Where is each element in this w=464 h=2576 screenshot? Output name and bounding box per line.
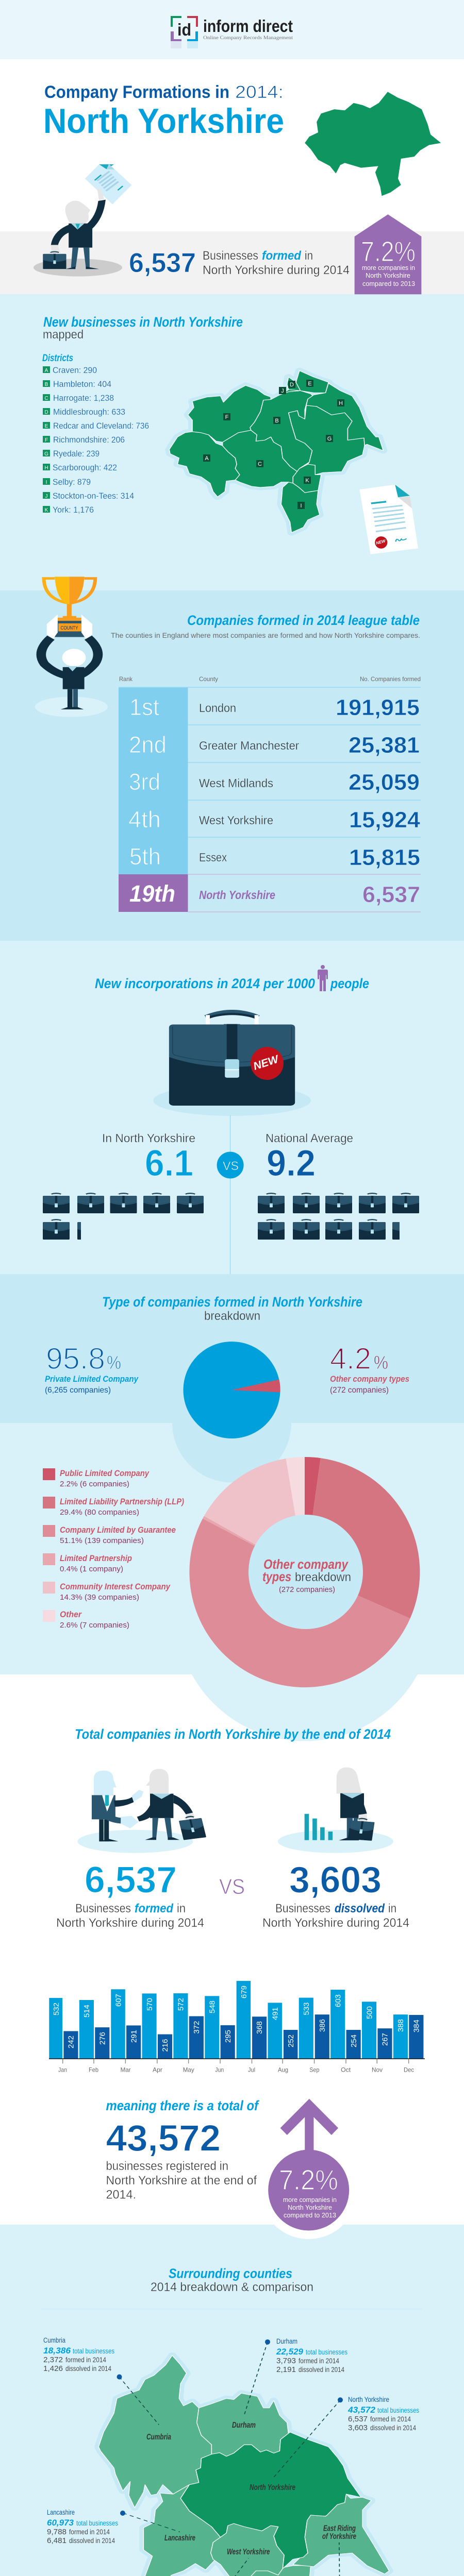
legend: districts: H — [44, 465, 48, 471]
bar chart: monthly formed and dissolved: 603 — [334, 1994, 342, 2007]
callout: Cumbria: 18,386 — [43, 2346, 71, 2355]
title — [43, 82, 284, 141]
stat: formed vs dissolved: formed — [135, 1902, 174, 1916]
table: companies formed league: 4th — [128, 806, 161, 833]
logo: inform direct: id — [177, 20, 191, 39]
legend: other company types: 2.2% (6 companies) — [60, 1480, 129, 1488]
bar chart: monthly formed and dissolved: Apr — [153, 2066, 162, 2073]
bar chart: monthly formed and dissolved: Mar — [121, 2066, 131, 2073]
bar chart: monthly formed and dissolved: 384 — [412, 2020, 421, 2032]
pictogram: 6.1 briefcases — [43, 1193, 204, 1240]
bar chart: monthly formed and dissolved: Oct — [341, 2066, 351, 2073]
icon: businessman holding document — [34, 164, 131, 277]
bar chart: monthly formed and dissolved: 267 — [380, 2033, 390, 2046]
callout: North Yorkshire: 6,537 — [348, 2415, 368, 2424]
callout: Durham: 2,191 — [276, 2365, 296, 2374]
callout: Lancashire: formed in 2014 — [69, 2528, 110, 2536]
bar chart: monthly formed and dissolved: 500 — [365, 2006, 374, 2019]
map: North Yorkshire districts: I — [300, 503, 302, 509]
donut chart: other company types breakdown — [189, 1457, 420, 1741]
callout: North Yorkshire — [347, 2396, 419, 2432]
legend: districts: Redcar and Cleveland: 736 — [53, 421, 149, 431]
donut chart: other company types breakdown: (272 companies) — [279, 1585, 335, 1594]
callout: Cumbria — [43, 2336, 114, 2373]
legend: districts: Stockton-on-Tees: 314 — [53, 491, 134, 501]
stat: formed vs dissolved: in — [177, 1902, 186, 1916]
stat: 6,537 businesses formed: formed — [262, 249, 302, 263]
table: companies formed league: Essex — [199, 851, 227, 864]
map: surrounding counties: North Yorkshire — [250, 2483, 295, 2492]
heading: new businesses mapped — [43, 314, 243, 342]
map: North Yorkshire districts: E — [308, 381, 312, 387]
legend: other company types: 29.4% (80 companies) — [60, 1508, 139, 1517]
comparison: North Yorkshire vs national average: National Average — [266, 1131, 353, 1145]
legend: other company types: 14.3% (39 companies) — [60, 1593, 139, 1602]
bar chart: monthly formed and dissolved: 216 — [161, 2039, 170, 2052]
callout: 7.2% arrow: compared to 2013 — [284, 2211, 336, 2219]
stat: 6,537 businesses formed: North Yorkshire during 2014 — [203, 263, 350, 277]
stat: formed vs dissolved: in — [388, 1902, 396, 1916]
callout: Durham: Durham — [276, 2337, 297, 2345]
heading: surrounding counties: Surrounding counties — [169, 2265, 292, 2281]
bar chart: monthly formed and dissolved: 572 — [176, 1998, 186, 2011]
heading: new incorporations per 1000 people: New incorporations in 2014 per 1000 — [95, 976, 315, 991]
legend: other company types: Public Limited Company — [60, 1468, 150, 1478]
stat: total 43,572: 43,572 — [106, 2119, 221, 2159]
table: companies formed league: North Yorkshire — [199, 888, 275, 902]
callout: Lancashire: Lancashire — [47, 2509, 75, 2516]
bar chart: monthly formed and dissolved: 570 — [145, 1998, 154, 2011]
legend: districts: Hambleton: 404 — [53, 379, 111, 389]
legend: districts: C — [44, 396, 48, 401]
map: surrounding counties — [98, 2340, 389, 2576]
map: surrounding counties: West Yorkshire — [227, 2548, 270, 2556]
bar chart: monthly formed and dissolved: 252 — [287, 2035, 295, 2047]
stat: other types 4.2%: Other company types — [330, 1374, 409, 1384]
callout: 7.2% arrow: 7.2% — [279, 2164, 338, 2196]
callout: Cumbria: 2,372 — [43, 2355, 63, 2364]
table: companies formed league: No. Companies formed — [360, 675, 421, 683]
callout: North Yorkshire: formed in 2014 — [370, 2415, 411, 2423]
legend: districts: B — [45, 382, 48, 387]
legend: other company types: 2.6% (7 companies) — [60, 1621, 129, 1630]
map: North Yorkshire districts: C — [258, 461, 262, 467]
bar chart: monthly formed and dissolved: 254 — [350, 2035, 358, 2047]
bar chart: monthly formed and dissolved: 291 — [130, 2030, 138, 2043]
table: companies formed league: 3rd — [129, 769, 160, 795]
stat: 6,537 businesses formed: in — [305, 249, 313, 263]
callout: 7.2% house: North Yorkshire — [366, 272, 410, 279]
callout: Lancashire: 60,973 — [47, 2518, 74, 2528]
table: companies formed league: 19th — [129, 880, 175, 907]
table: companies formed league: London — [199, 701, 236, 715]
icon: businessman with falling bar chart — [278, 1768, 393, 1853]
stat: formed vs dissolved — [56, 1860, 409, 1930]
stat: 6,537 businesses formed: 6,537 — [129, 248, 196, 278]
callout: North Yorkshire: dissolved in 2014 — [370, 2424, 416, 2432]
table: companies formed league: 15,815 — [349, 845, 420, 870]
table: companies formed league: West Yorkshire — [199, 814, 273, 827]
stat: formed vs dissolved: Businesses — [75, 1902, 131, 1916]
map: surrounding counties: Cumbria — [146, 2433, 171, 2442]
legend: districts: F — [45, 437, 48, 443]
legend: other company types: Limited Liability Partnership (LLP) — [60, 1497, 184, 1506]
table: companies formed league: 5th — [129, 843, 161, 870]
stat: other types 4.2% — [330, 1342, 409, 1395]
callout: North Yorkshire: 3,603 — [348, 2424, 368, 2432]
heading: surrounding counties: 2014 breakdown & comparison — [151, 2280, 313, 2294]
legend: districts: J — [45, 494, 47, 499]
donut chart: other company types breakdown: breakdown — [295, 1570, 351, 1584]
legend: districts: Scarborough: 422 — [53, 463, 117, 472]
heading: type of companies: Type of companies formed in North Yorkshire — [102, 1294, 362, 1310]
stat: private limited 95.8%: 95.8 — [46, 1342, 105, 1376]
bar chart: monthly formed and dissolved: 372 — [192, 2021, 201, 2034]
callout: Cumbria: 1,426 — [43, 2364, 63, 2373]
map: surrounding counties: East Riding — [323, 2524, 356, 2533]
map: North Yorkshire districts: H — [339, 400, 343, 406]
legend: districts — [42, 353, 149, 515]
legend: other company types: 51.1% (139 companies) — [60, 1536, 144, 1545]
callout: 7.2% arrow — [260, 2099, 358, 2239]
callout: Durham: formed in 2014 — [299, 2357, 339, 2365]
callout: Cumbria: total businesses — [73, 2347, 114, 2355]
callout: 7.2% house: compared to 2013 — [362, 280, 415, 287]
bar chart: monthly formed and dissolved: 532 — [52, 2003, 61, 2015]
callout: Lancashire: total businesses — [76, 2519, 118, 2527]
heading: new businesses mapped: mapped — [43, 328, 84, 342]
icon: new company document — [359, 485, 418, 554]
table: companies formed league: County — [199, 675, 218, 683]
bar chart: monthly formed and dissolved: 276 — [98, 2032, 107, 2045]
bar chart: monthly formed and dissolved: 607 — [114, 1994, 123, 2007]
heading: type of companies — [102, 1294, 362, 1323]
map: North Yorkshire districts: F — [225, 414, 229, 420]
heading: total companies by end of 2014: Total companies in North Yorkshire by the end of 2014 — [75, 1726, 391, 1742]
table: companies formed league: 15,924 — [349, 807, 421, 833]
callout: Cumbria: formed in 2014 — [65, 2356, 106, 2364]
icon: person holding county trophy — [35, 577, 108, 717]
bar chart: monthly formed and dissolved: 679 — [240, 1986, 248, 1998]
callout: Durham: dissolved in 2014 — [299, 2366, 344, 2374]
trophy label: COUNTY — [61, 625, 78, 631]
legend: districts: Ryedale: 239 — [53, 449, 100, 459]
icon: new company document: NEW — [375, 538, 387, 546]
map: North Yorkshire silhouette — [305, 92, 441, 196]
legend: districts: Craven: 290 — [53, 365, 97, 375]
bar chart: monthly formed and dissolved: Aug — [278, 2066, 288, 2073]
donut chart: other company types breakdown: Other company — [263, 1556, 349, 1572]
callout: North Yorkshire: 43,572 — [347, 2405, 376, 2415]
map: North Yorkshire districts: A — [205, 455, 209, 462]
map: North Yorkshire districts: J — [281, 388, 284, 394]
callout: Durham: 22,529 — [276, 2347, 304, 2357]
map: North Yorkshire districts: D — [290, 382, 294, 388]
legend: other company types: Limited Partnership — [60, 1553, 132, 1563]
stat: formed vs dissolved: 6,537 — [85, 1860, 177, 1901]
bar chart: monthly formed and dissolved: Sep — [309, 2066, 320, 2073]
table: companies formed league: 1st — [129, 694, 159, 720]
bar chart: monthly formed and dissolved: 242 — [67, 2036, 76, 2048]
legend: districts: E — [45, 423, 48, 429]
bar chart: monthly formed and dissolved: 548 — [208, 2001, 217, 2013]
legend: districts: Districts — [42, 353, 73, 364]
legend: districts: K — [45, 507, 48, 513]
comparison: North Yorkshire vs national average: In North Yorkshire — [102, 1131, 195, 1145]
callout: Cumbria: Cumbria — [43, 2336, 65, 2344]
stat: total 43,572: businesses registered in — [106, 2159, 228, 2173]
bar chart: monthly formed and dissolved: 388 — [396, 2019, 405, 2032]
comparison: North Yorkshire vs national average — [102, 1131, 353, 1184]
bar chart: monthly formed and dissolved: Dec — [404, 2066, 414, 2073]
donut chart: other company types breakdown: types — [262, 1569, 291, 1584]
stat: formed vs dissolved: North Yorkshire during 2014 — [262, 1916, 409, 1930]
callout: Cumbria: dissolved in 2014 — [65, 2365, 111, 2372]
stat: formed vs dissolved: dissolved — [335, 1902, 385, 1916]
stat: 6,537 businesses formed: Businesses — [203, 249, 258, 263]
map: North Yorkshire districts: B — [275, 418, 279, 424]
legend: districts: A — [45, 368, 48, 374]
stat: total 43,572: North Yorkshire at the end of — [106, 2174, 257, 2188]
heading: surrounding counties — [41, 2265, 422, 2309]
panel: league table heading: Companies formed in 2014 league table — [187, 613, 420, 628]
legend: other company types: Community Interest Company — [60, 1582, 171, 1591]
callout: Durham: total businesses — [306, 2348, 347, 2356]
legend: districts: Harrogate: 1,238 — [53, 393, 114, 403]
stat: 6,537 businesses formed — [129, 248, 350, 278]
heading: type of companies: breakdown — [204, 1309, 260, 1323]
map: surrounding counties: of Yorkshire — [322, 2532, 356, 2541]
legend: other company types: Company Limited by Guarantee — [60, 1525, 176, 1535]
legend: districts: York: 1,176 — [53, 505, 94, 515]
callout: 7.2% house: 7.2% — [361, 235, 416, 267]
bar chart: monthly formed and dissolved: Jan — [58, 2066, 67, 2073]
stat: formed vs dissolved: VS — [219, 1874, 245, 1899]
callout: North Yorkshire: North Yorkshire — [348, 2396, 389, 2403]
legend: districts: G — [44, 451, 48, 457]
map: North Yorkshire districts: K — [305, 478, 309, 484]
legend: districts: Middlesbrough: 633 — [53, 407, 125, 417]
comparison: North Yorkshire vs national average: VS — [223, 1159, 239, 1173]
table: companies formed league — [119, 675, 421, 912]
comparison: North Yorkshire vs national average: 9.2 — [267, 1143, 316, 1184]
logo: inform direct — [171, 16, 293, 48]
comparison: North Yorkshire vs national average: 6.1 — [145, 1143, 193, 1184]
callout: Lancashire: dissolved in 2014 — [69, 2537, 115, 2545]
bar chart: monthly formed and dissolved: Feb — [89, 2066, 98, 2073]
table: companies formed league: 25,381 — [349, 733, 420, 758]
bar chart: monthly formed and dissolved: 368 — [255, 2021, 264, 2034]
bar chart: monthly formed and dissolved: 295 — [224, 2030, 233, 2043]
stat: other types 4.2%: % — [374, 1352, 388, 1373]
bar chart: monthly formed and dissolved — [49, 1981, 425, 2073]
stat: total 43,572: meaning there is a total of — [106, 2098, 260, 2113]
callout: 7.2% arrow: North Yorkshire — [288, 2204, 332, 2211]
map: surrounding counties: Lancashire — [164, 2534, 195, 2543]
legend: other company types — [43, 1468, 184, 1630]
callout: Durham — [276, 2337, 347, 2374]
bar chart: monthly formed and dissolved: 514 — [82, 2005, 91, 2018]
panel: league table heading — [111, 613, 420, 639]
table: companies formed league: 25,059 — [349, 770, 420, 795]
heading: new incorporations per 1000 people — [95, 965, 369, 991]
legend: districts: Selby: 879 — [53, 477, 91, 487]
bar chart: monthly formed and dissolved: Jun — [215, 2066, 224, 2073]
stat: private limited 95.8%: Private Limited Company — [45, 1374, 139, 1384]
bar chart: monthly formed and dissolved: 491 — [271, 2007, 279, 2020]
legend: districts: Richmondshire: 206 — [53, 435, 125, 445]
title: Company Formations in — [44, 82, 229, 102]
stat: formed vs dissolved: 3,603 — [289, 1860, 382, 1901]
stat: private limited 95.8% — [45, 1342, 139, 1395]
stat: other types 4.2%: (272 companies) — [330, 1386, 389, 1395]
legend: districts: I — [46, 480, 47, 485]
title: 2014: — [235, 82, 284, 102]
icon: large new briefcase — [153, 1012, 311, 1274]
legend: districts: D — [44, 410, 48, 415]
callout: Lancashire — [47, 2509, 118, 2545]
logo: inform direct: inform direct — [203, 16, 293, 36]
bar chart: monthly formed and dissolved: Nov — [372, 2066, 383, 2073]
stat: formed vs dissolved: Businesses — [275, 1902, 330, 1916]
stat: formed vs dissolved: North Yorkshire during 2014 — [56, 1916, 204, 1930]
callout: North Yorkshire: total businesses — [377, 2406, 419, 2414]
map: North Yorkshire districts — [169, 371, 383, 533]
icon: two businessmen shaking hands — [77, 1769, 206, 1853]
callout: 7.2% house — [355, 214, 421, 294]
panel: league table heading: The counties in England where most companies are formed and how North Yorkshire compares. — [111, 631, 420, 639]
table: companies formed league: Rank — [119, 675, 133, 683]
map: North Yorkshire districts: G — [327, 436, 332, 442]
logo: inform direct: Online Company Records Management — [203, 36, 293, 41]
callout: Lancashire: 6,481 — [47, 2536, 67, 2545]
callout: Lancashire: 9,788 — [47, 2528, 67, 2536]
stat: total 43,572 — [106, 2098, 260, 2202]
callout: 7.2% arrow: more companies in — [283, 2196, 337, 2204]
callout: Durham: 3,793 — [276, 2357, 296, 2365]
table: companies formed league: 2nd — [129, 732, 167, 758]
legend: other company types: 0.4% (1 company) — [60, 1565, 123, 1573]
bar chart: monthly formed and dissolved: 533 — [302, 2002, 311, 2015]
title: North Yorkshire — [43, 101, 284, 141]
heading: new incorporations per 1000 people: people — [330, 976, 369, 991]
pie chart: company types — [172, 1342, 291, 1482]
map: surrounding counties: Durham — [232, 2421, 256, 2430]
bar chart: monthly formed and dissolved: Jul — [248, 2066, 255, 2073]
stat: total 43,572: 2014. — [106, 2188, 136, 2202]
legend: other company types: Other — [60, 1609, 82, 1619]
stat: other types 4.2%: 4.2 — [330, 1342, 371, 1376]
callout: 7.2% house: more companies in — [362, 264, 415, 272]
stat: private limited 95.8%: % — [107, 1352, 121, 1373]
table: companies formed league: Greater Manchester — [199, 739, 299, 752]
icon: large new briefcase: NEW — [252, 1053, 281, 1073]
table: companies formed league: 191,915 — [336, 695, 420, 720]
table: companies formed league: 6,537 — [362, 882, 420, 907]
heading: new businesses mapped: New businesses in North Yorkshire — [43, 314, 243, 330]
table: companies formed league: West Midlands — [199, 776, 273, 790]
bar chart: monthly formed and dissolved: May — [183, 2066, 194, 2073]
bar chart: monthly formed and dissolved: 386 — [318, 2019, 327, 2032]
pictogram: 9.2 briefcases — [258, 1193, 419, 1240]
stat: private limited 95.8%: (6,265 companies) — [45, 1386, 111, 1395]
